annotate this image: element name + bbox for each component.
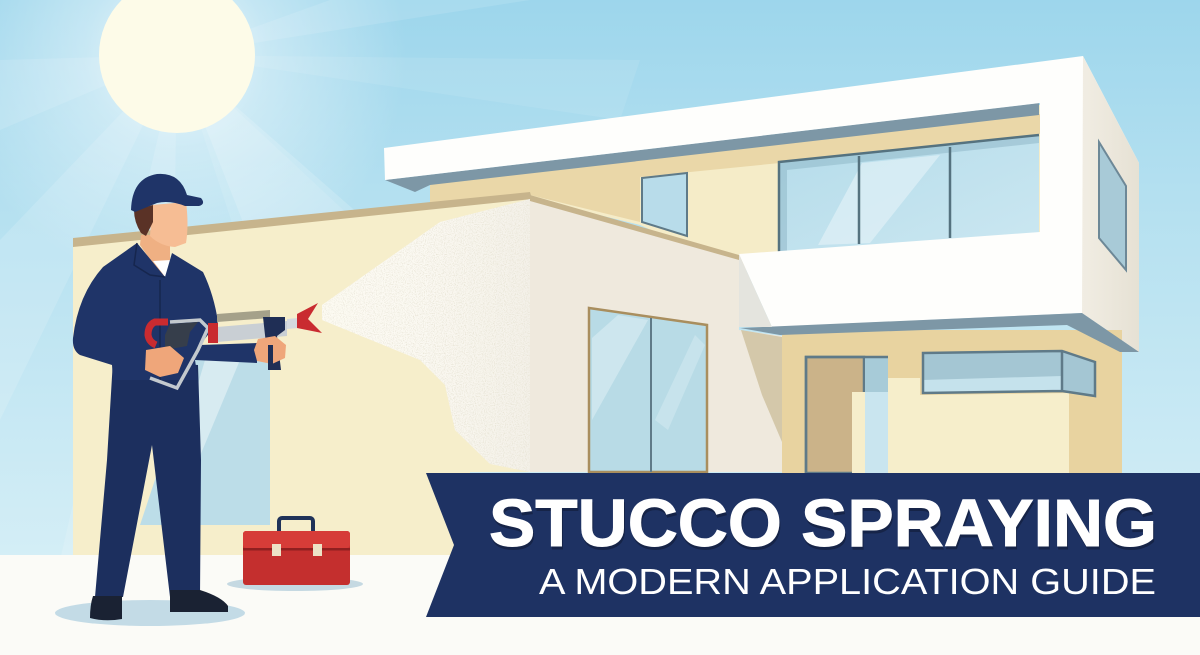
lower storey wall: [782, 330, 1122, 473]
title banner: STUCCO SPRAYING: [489, 486, 1157, 561]
house: [73, 56, 1139, 555]
torso and arms: [73, 243, 257, 380]
head: [134, 202, 188, 247]
rear hand: [145, 346, 184, 377]
subtitle: A MODERN APPLICATION GUIDE: [539, 561, 1156, 602]
central large window: [589, 308, 707, 472]
toolbox shadow: [227, 577, 363, 591]
spray fan: [322, 199, 530, 472]
worker: [73, 174, 322, 620]
shaded recess: [741, 330, 782, 442]
left wall top trim: [73, 192, 532, 247]
cap: [131, 174, 203, 212]
central white wall: [530, 198, 782, 472]
left wall window: [140, 350, 270, 525]
sun rays: [0, 0, 640, 560]
balcony left face: [739, 254, 772, 327]
left cream wall: [73, 198, 530, 555]
ribbon window: [923, 351, 1095, 396]
side window: [1099, 142, 1126, 270]
front grip overlap: [268, 345, 273, 370]
neck and shirt: [140, 235, 171, 278]
white upper block: [384, 56, 1139, 352]
balcony underside band: [740, 313, 1139, 352]
upper storey recessed wall: [430, 105, 1040, 270]
ground floor door: [806, 356, 888, 473]
upper side window: [642, 173, 687, 236]
spray gun: [148, 303, 322, 388]
upper balcony window: [779, 135, 1039, 252]
title banner: [426, 473, 1200, 617]
sunlit lower wall: [851, 378, 1069, 473]
roof shadow band: [385, 103, 1039, 192]
front hand: [254, 336, 286, 364]
sun: [0, 0, 407, 285]
ground: [0, 555, 1200, 655]
title: STUCCO SPRAYING: [490, 489, 1158, 564]
icon: red toolbox: [243, 518, 350, 585]
worker shadow: [55, 600, 245, 626]
side face of upper block: [1082, 56, 1139, 352]
legs and boots: [90, 360, 228, 620]
